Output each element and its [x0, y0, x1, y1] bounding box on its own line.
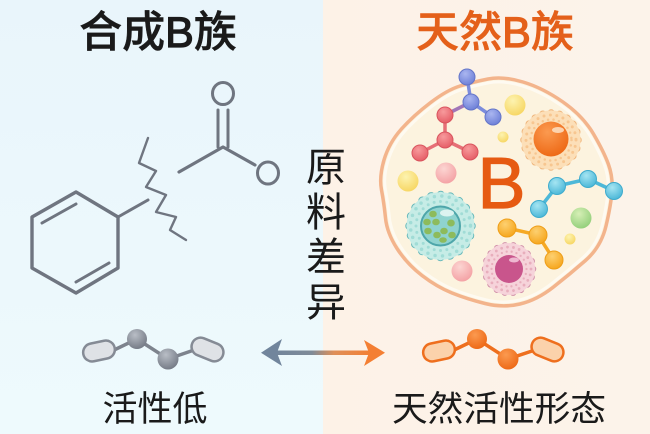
large letter B: B [477, 144, 526, 224]
panel: synthetic background [0, 0, 323, 434]
heading: synthetic B: 合成B族 [79, 9, 237, 57]
double arrow [261, 339, 385, 366]
molecule: blue [445, 69, 501, 125]
icon: orange molecule [421, 329, 566, 370]
orange cell [524, 113, 578, 167]
molecule: red [412, 107, 478, 161]
vertical label: raw material difference: 料 [306, 191, 346, 235]
chemical structure: synthetic molecule [32, 82, 278, 293]
molecule: cyan [530, 170, 622, 218]
small vesicles [398, 94, 592, 282]
cell membrane [381, 78, 612, 306]
vertical label: raw material difference [306, 146, 346, 325]
molecule: amber [498, 219, 563, 269]
vertical label: raw material difference: 原 [306, 146, 346, 190]
vertical label: raw material difference: 差 [306, 236, 346, 280]
teal cell [410, 195, 472, 257]
panel: natural background [323, 0, 650, 434]
illustration: natural cell [381, 69, 622, 306]
heading: natural B: 天然B族 [416, 9, 574, 57]
label: natural active form: 天然活性形态 [392, 390, 606, 429]
pink cell [485, 245, 533, 293]
label: low activity: 活性低 [102, 390, 208, 429]
vertical label: raw material difference: 异 [306, 281, 346, 325]
icon: grey molecule [81, 329, 226, 370]
